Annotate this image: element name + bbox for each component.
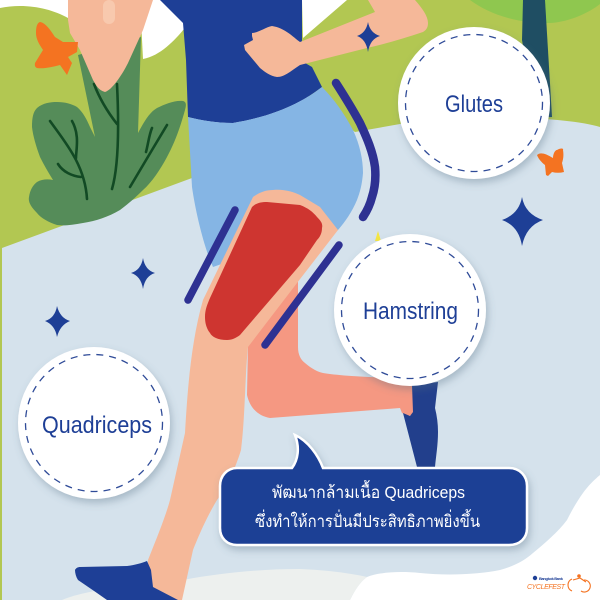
star	[131, 258, 155, 289]
star	[45, 306, 70, 337]
circle: Hamstring: Hamstring	[363, 298, 458, 325]
motion lines	[188, 83, 375, 345]
shirt	[160, 0, 322, 123]
speech bubble: ซึ่งทำให้การปั่นมีประสิทธิภาพยิ่งขึ้น	[255, 509, 480, 531]
yellow spark	[375, 231, 381, 241]
white triangle	[302, 0, 347, 38]
butterfly: right	[537, 148, 564, 176]
speech bubble	[220, 435, 527, 545]
circle: Quadriceps	[18, 347, 170, 499]
leg highlight	[103, 0, 115, 24]
bottom ground: white	[350, 475, 600, 600]
plant	[29, 37, 186, 225]
plant foliage	[29, 37, 186, 225]
back leg: lower hamstring	[247, 278, 413, 418]
circle: Glutes	[398, 27, 550, 179]
shorts	[188, 87, 363, 267]
background: top white area	[0, 0, 320, 70]
leg: raised knee thigh top	[68, 0, 153, 92]
tree trunk	[522, 0, 552, 118]
back leg: sock	[403, 382, 438, 467]
shoe	[75, 561, 178, 600]
muscle: quadriceps red	[205, 202, 322, 340]
bubble text: พัฒนากล้ามเนื้อ Quadriceps	[272, 480, 465, 502]
circle: Glutes: Glutes	[445, 91, 503, 118]
circle: Quadriceps: Quadriceps	[42, 412, 152, 439]
star	[502, 197, 543, 246]
logo	[527, 574, 590, 592]
background: white patch beside shirt	[140, 0, 184, 59]
logo: Bangkok Bank	[539, 576, 564, 581]
front leg	[148, 190, 338, 600]
logo: CYCLEFEST	[527, 584, 566, 591]
tree foliage	[470, 0, 600, 23]
bottom ground: grey path	[62, 569, 367, 600]
circle: Hamstring	[334, 234, 486, 386]
star	[357, 22, 380, 52]
plant veins	[50, 84, 167, 199]
butterfly: left	[35, 22, 78, 75]
arm and fist	[244, 0, 428, 77]
